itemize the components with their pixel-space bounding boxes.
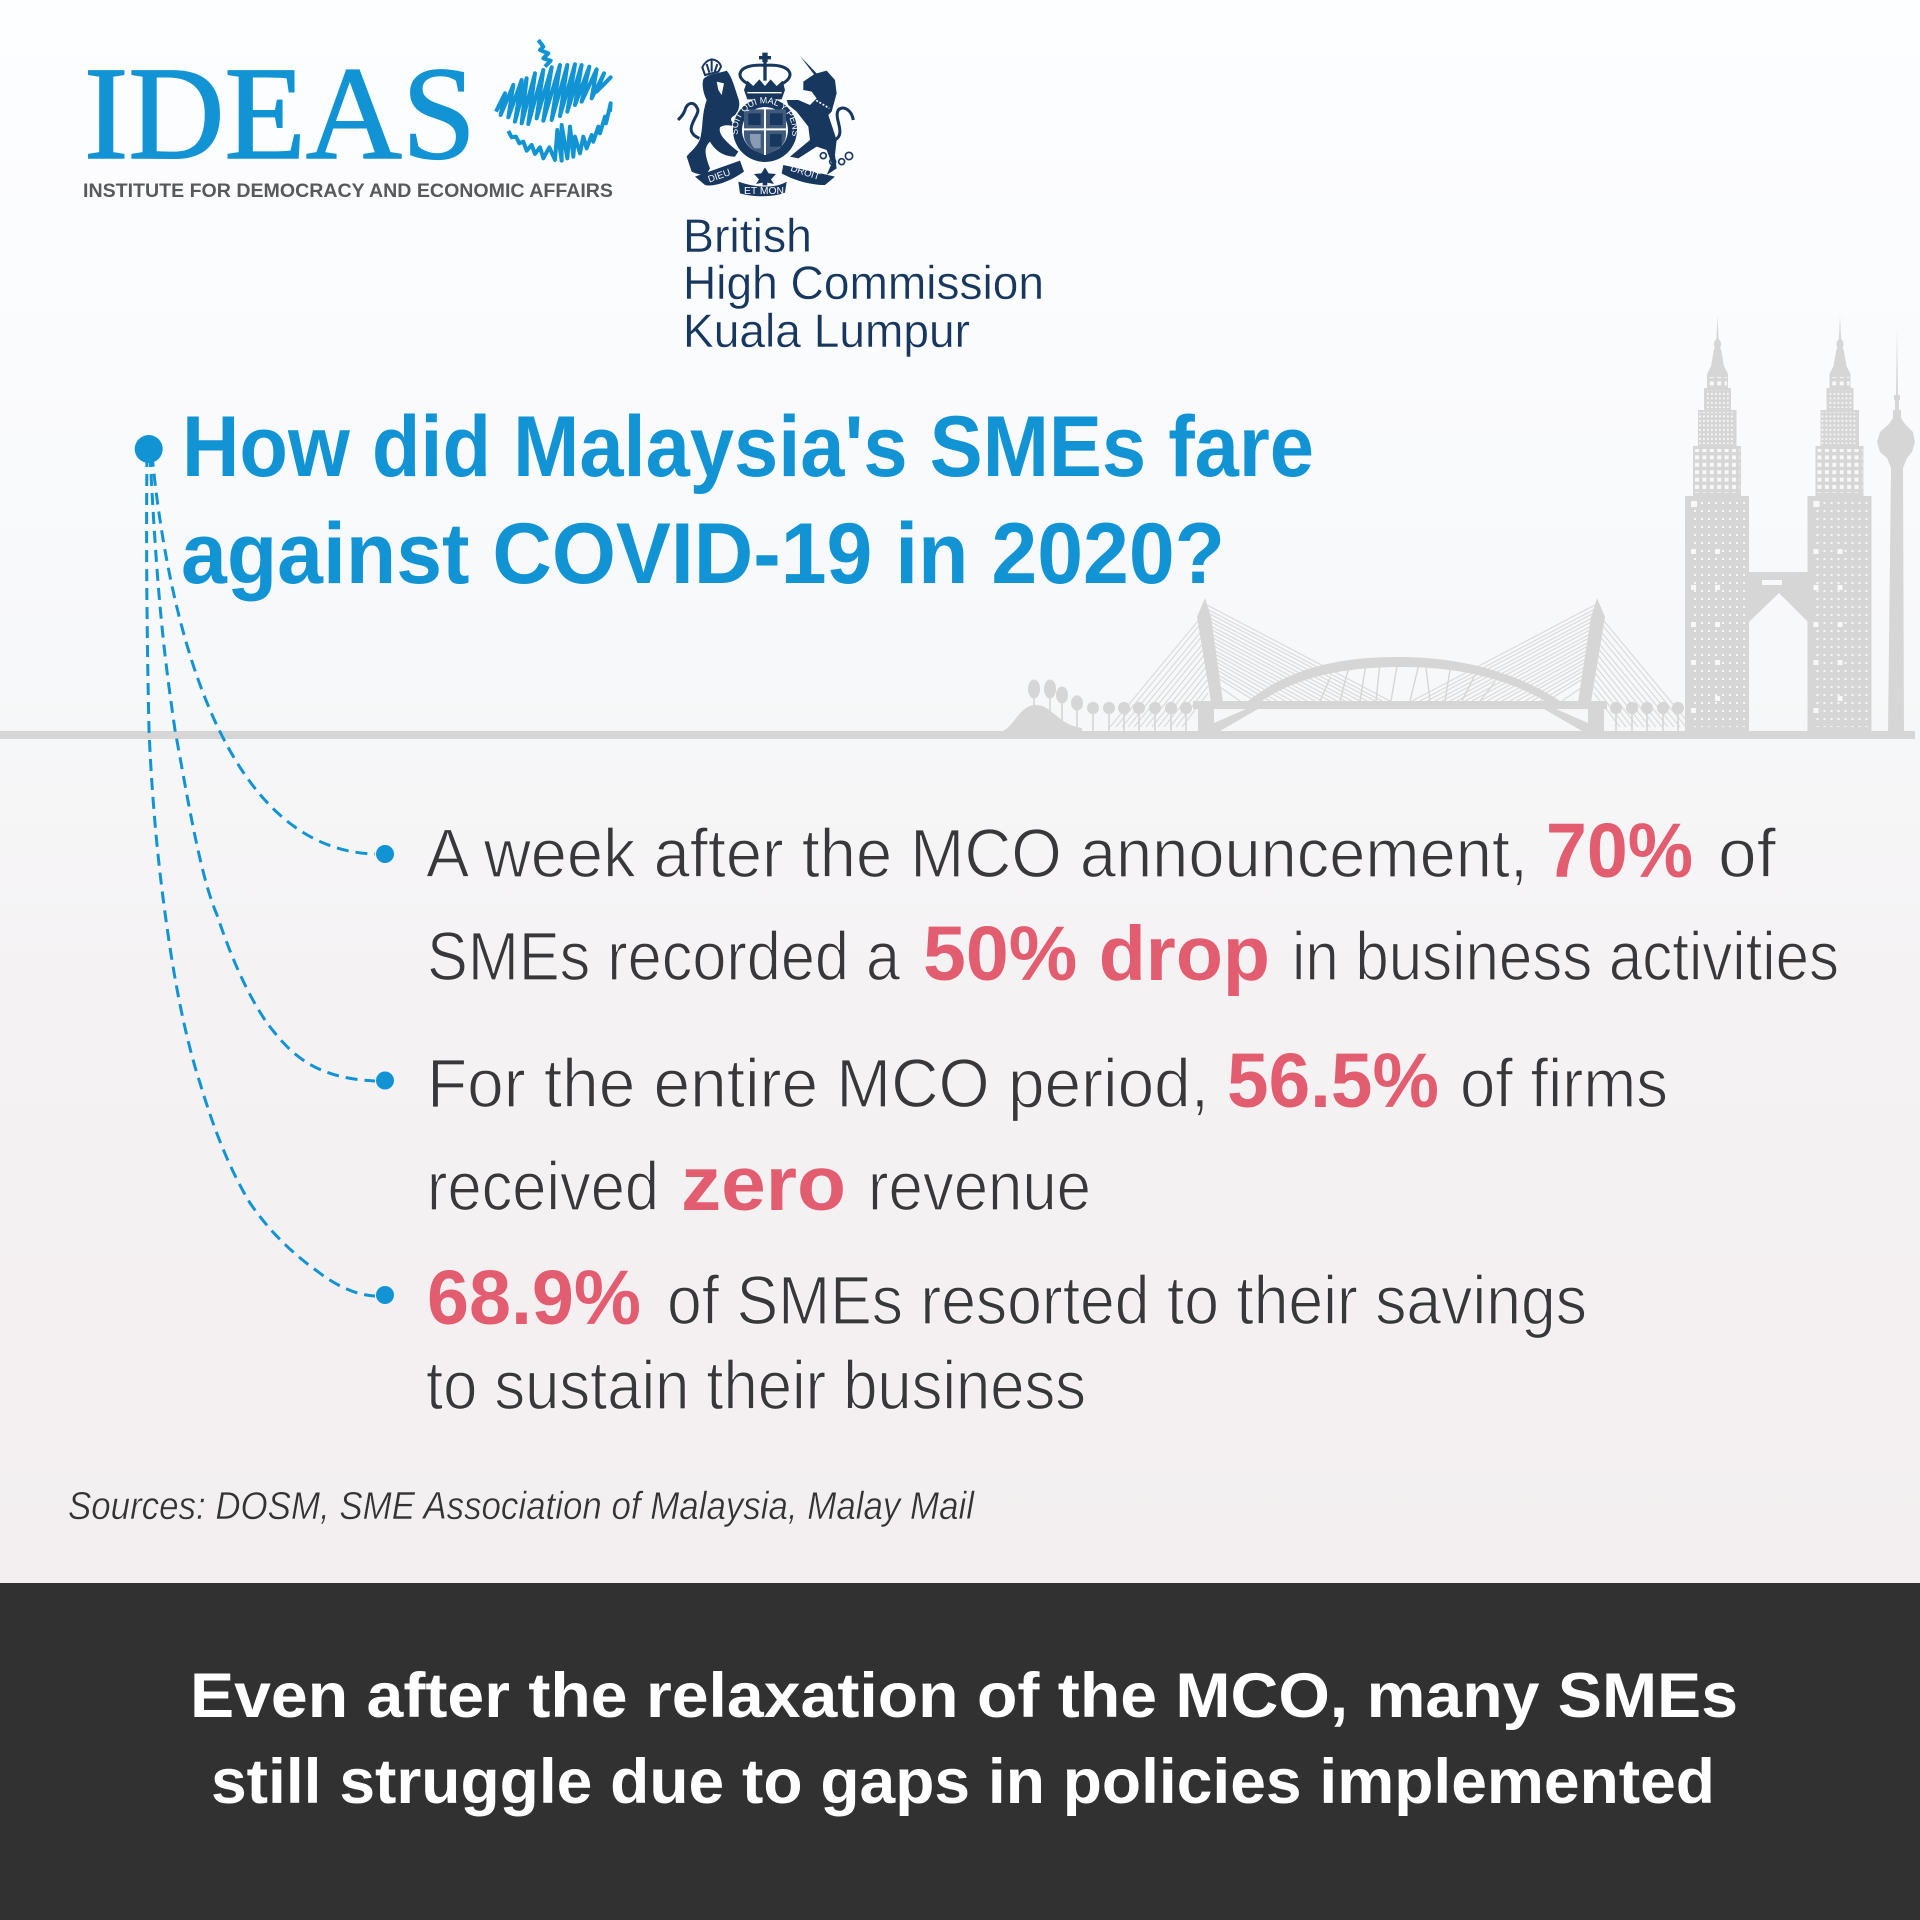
British High Commission Kuala Lumpur label: High Commission — [683, 256, 1044, 309]
statement: 56.5 percent — [427, 1038, 1668, 1227]
title dot — [135, 435, 163, 463]
statement: 56.5 percent: of firms — [1460, 1045, 1668, 1122]
logo scribble emblem — [496, 40, 611, 161]
statement: 56.5 percent: revenue — [868, 1148, 1091, 1225]
statement: 70 percent: A week after the MCO announcement, — [426, 815, 1528, 892]
conclusion banner: Even after the relaxation of the MCO, many SMEs — [190, 1661, 1738, 1731]
sources: Sources: DOSM, SME Association of Malaysia, Malay Mail — [68, 1485, 975, 1528]
royal crown — [740, 53, 790, 99]
motto scroll: ET MON — [744, 186, 784, 197]
statement: 70 percent: in business activities — [1292, 918, 1839, 995]
British High Commission Kuala Lumpur label: British — [683, 209, 812, 262]
ground line — [0, 731, 1915, 739]
KL tower — [1877, 328, 1915, 731]
title: against COVID-19 in 2020? — [181, 506, 1225, 602]
garter and shield: SOIT QUI MAL Y PENSE — [732, 97, 797, 136]
title — [181, 399, 1314, 602]
British High Commission Kuala Lumpur label: Kuala Lumpur — [683, 304, 970, 357]
Petronas twin towers — [1685, 316, 1872, 731]
statement: 70 percent — [426, 808, 1839, 997]
royal coat of arms — [677, 52, 855, 197]
statement: 68.9 percent: of SMEs resorted to their savings — [667, 1262, 1587, 1339]
trees — [1028, 680, 1684, 733]
bridge hangers — [1320, 662, 1495, 701]
motto scroll: DIEU — [707, 167, 732, 185]
motto scroll: DROIT — [789, 163, 821, 183]
skyline illustration — [0, 316, 1915, 739]
logo tagline: INSTITUTE FOR DEMOCRACY AND ECONOMIC AFFAIRS — [83, 180, 613, 202]
title: How did Malaysia's SMEs fare — [182, 399, 1314, 495]
motto scroll — [695, 161, 835, 197]
bridge structure — [1003, 598, 1607, 731]
statement: 68.9 percent: 68.9% — [427, 1255, 641, 1341]
lion crown — [702, 59, 721, 75]
statement: 70 percent: SMEs recorded a — [427, 918, 901, 995]
statement: 56.5 percent: For the entire MCO period, — [427, 1045, 1209, 1122]
statement: 68.9 percent — [426, 1255, 1587, 1424]
statement: 70 percent: of — [1718, 815, 1777, 892]
unicorn collar — [810, 97, 829, 108]
logo wordmark: IDEAS — [84, 39, 476, 187]
lion face mark — [717, 82, 724, 95]
bullet dots — [376, 845, 394, 1304]
statement: 56.5 percent: zero — [681, 1141, 846, 1227]
IDEAS logo — [83, 39, 613, 202]
statement: 56.5 percent: received — [427, 1148, 659, 1225]
statement: 70 percent: 50% drop — [923, 911, 1270, 997]
conclusion banner — [0, 1583, 1920, 1920]
bridge cables — [1110, 605, 1692, 727]
unicorn chain — [820, 152, 853, 165]
unicorn tail — [835, 108, 853, 140]
unicorn — [787, 56, 837, 175]
lion tail — [678, 103, 699, 138]
statement: 70 percent: 70% — [1546, 808, 1693, 894]
lion — [687, 71, 739, 175]
garter and shield — [732, 97, 797, 162]
statement: 56.5 percent: 56.5% — [1227, 1038, 1439, 1124]
statement: 68.9 percent: to sustain their business — [426, 1347, 1086, 1424]
conclusion banner: still struggle due to gaps in policies implemented — [211, 1747, 1715, 1817]
dashed connectors — [147, 455, 375, 1296]
British High Commission Kuala Lumpur label — [683, 209, 1044, 357]
